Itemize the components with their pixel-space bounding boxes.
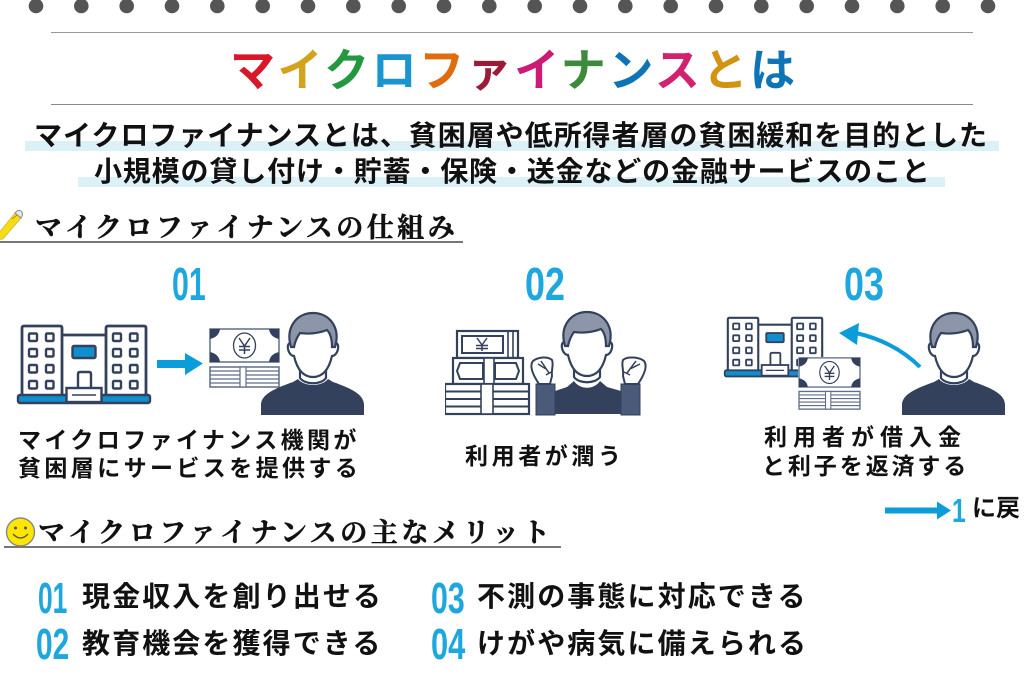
merit 1 text: 現金収入を創り出せる [82, 581, 383, 612]
definition text: 小規模の貸し付け・貯蓄・保険・送金などの金融サービスのこと [94, 156, 931, 187]
merit number 03: 03 [431, 574, 465, 623]
step 1 text [18, 427, 361, 480]
step 3 text line 2: と利子を返済する [762, 453, 969, 479]
merit number 02: 02 [36, 620, 69, 669]
icon: pencil [0, 210, 23, 240]
title: マイクロファイナンスとは [230, 45, 797, 96]
merit 4 text: けがや病気に備えられる [477, 628, 808, 659]
step 2 text: 利用者が潤う [465, 443, 625, 469]
definition text [34, 120, 988, 187]
decorative dot row [28, 0, 996, 14]
arrow: back to step 1 [885, 502, 951, 520]
back to step 1 label: に戻 [972, 495, 1020, 522]
icon: institution building (step 3) [724, 316, 824, 378]
icon: banknote and bundle (step 1) [209, 328, 280, 388]
step 1 text: 貧困層にサービスを提供する [18, 454, 361, 480]
merit number 04: 04 [431, 620, 465, 669]
step 3 text: 利用者が借入金 [764, 424, 967, 450]
number 03: 03 [844, 258, 884, 310]
heading: merits: マイクロファイナンスの主なメリット [38, 511, 553, 550]
arrow: repayment [839, 323, 922, 368]
icon: person (step 3) [902, 312, 1005, 415]
number 01: 01 [172, 258, 206, 310]
icon: money stack (step 2) [445, 330, 530, 416]
step 1 text: マイクロファイナンス機関が [18, 427, 360, 453]
number 02: 02 [525, 258, 565, 310]
heading: mechanism: マイクロファイナンスの仕組み [35, 206, 458, 245]
merit 2 text: 教育機会を獲得できる [82, 628, 382, 659]
icon: happy person with raised fists (step 2) [530, 310, 647, 416]
merit number 01: 01 [38, 574, 67, 623]
icon: institution building (step 1) [16, 324, 152, 404]
icon: person (step 1) [261, 312, 364, 415]
number 1: 1 [952, 492, 966, 529]
icon: banknote and bundle (step 3) [798, 357, 861, 410]
icon: smiley [6, 517, 36, 546]
arrow: building to money [157, 353, 203, 375]
merit 3 text: 不測の事態に対応できる [477, 581, 808, 612]
definition text: マイクロファイナンスとは、貧困層や低所得者層の貧困緩和を目的とした [34, 120, 988, 151]
